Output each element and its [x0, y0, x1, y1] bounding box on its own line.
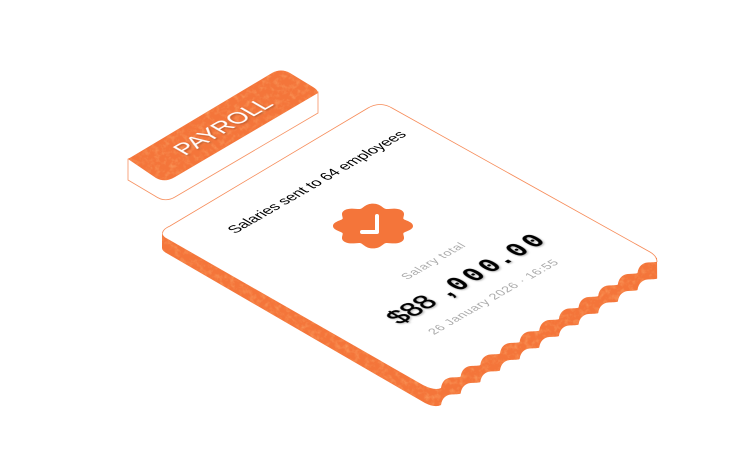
receipt card	[162, 104, 657, 406]
payroll tag	[128, 70, 318, 200]
salary label: Salary total	[397, 241, 469, 281]
icon: scalloped check badge	[333, 204, 413, 248]
tag label: PAYROLL	[167, 94, 279, 158]
salary amount: 00	[498, 228, 555, 261]
receipt thickness	[162, 200, 657, 406]
tag top face	[128, 70, 318, 180]
receipt heading: Salaries sent to 64 employees	[224, 129, 411, 236]
receipt outline	[162, 104, 657, 262]
receipt top face	[162, 104, 657, 389]
salary amount: ,	[428, 281, 461, 300]
tag side	[128, 92, 318, 200]
salary amount: 000	[438, 253, 512, 295]
payment date: 26 January 2026 · 16:55	[424, 257, 562, 336]
salary amount: $88	[379, 291, 444, 328]
salary amount: .	[486, 249, 518, 267]
